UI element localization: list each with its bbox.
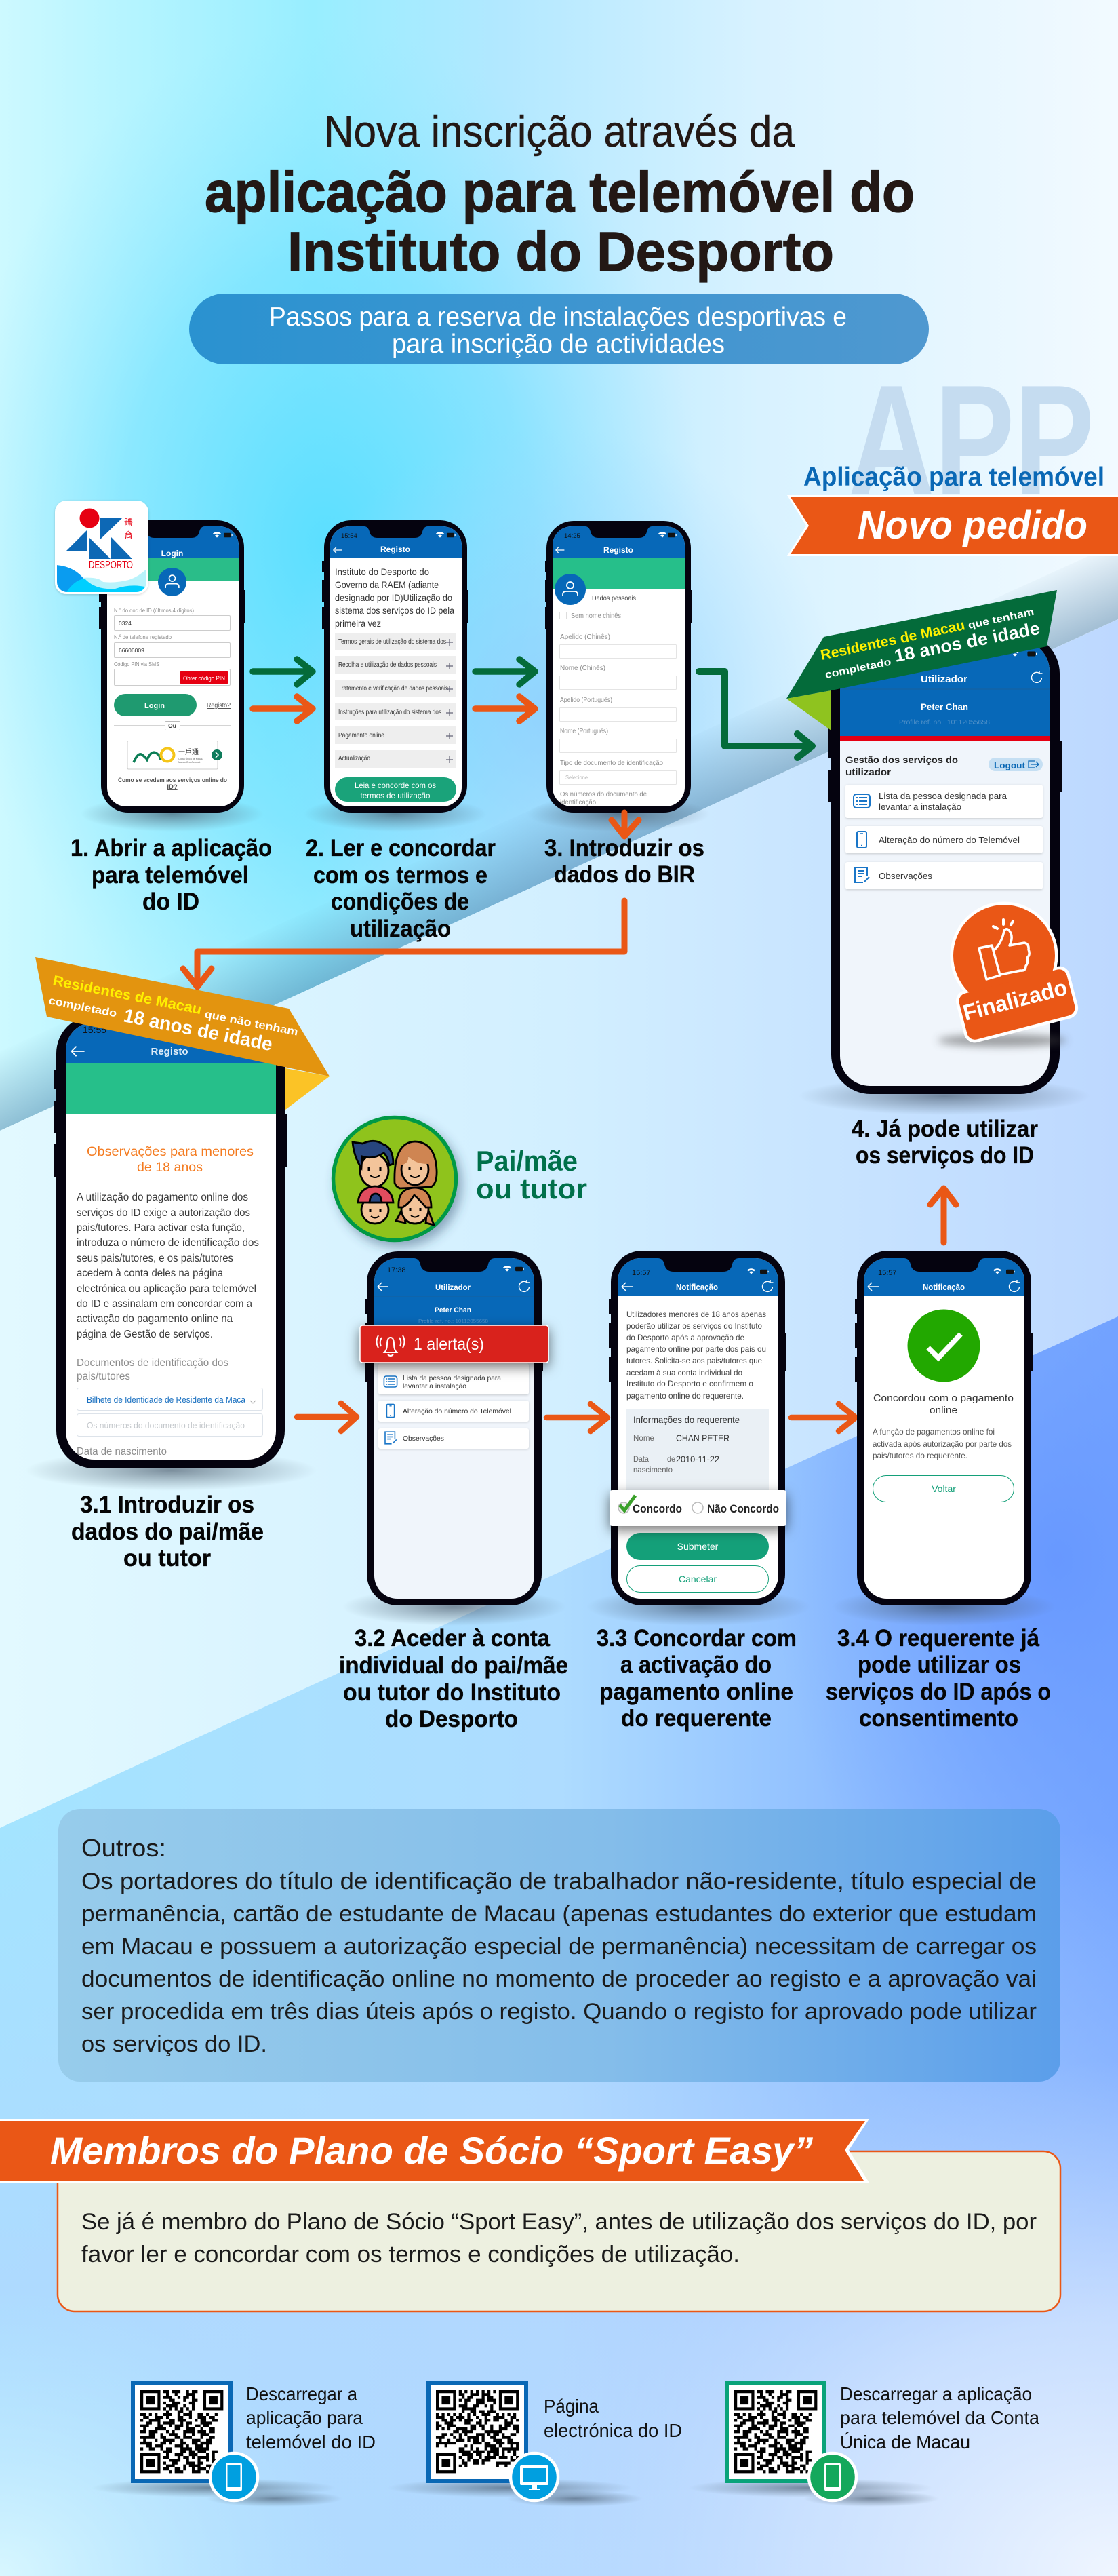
- QR block: app download: telemóvel do ID: [246, 2432, 376, 2453]
- caption: step 3.4: consentimento: [859, 1705, 1018, 1732]
- screen 3.1: electrónica ou aplicação para telemóvel: [77, 1283, 256, 1295]
- logo: Desporto app icon: 體: [124, 515, 133, 528]
- arrow: green connector to step 4: [699, 671, 812, 758]
- mom: [395, 1141, 437, 1188]
- screen 3.1: de 18 anos: [137, 1160, 203, 1175]
- title: Instituto do Desporto: [287, 221, 834, 283]
- phone 3.1: parents data: [37, 1022, 304, 1489]
- screen 3.1: Os números do documento de identificação: [87, 1420, 245, 1430]
- screen 3.2: levantar a instalação: [403, 1382, 466, 1390]
- screen 3.1: página de Gestão de serviços.: [77, 1329, 213, 1340]
- screen 3: Tipo de documento de identificação: [560, 760, 663, 767]
- screen 3.2: Utilizador: [435, 1283, 471, 1292]
- caption: step 3.1: 3.1 Introduzir os: [80, 1491, 254, 1518]
- screen 1: Como se acedem aos serviços online do: [118, 777, 227, 784]
- screen 2: 15:54: [341, 532, 357, 540]
- ribbon: over 18 (green): que tenham: [967, 606, 1035, 631]
- caption: step 2: com os termos e: [313, 862, 487, 889]
- screen 2: Recolha e utilização de dados pessoais: [338, 661, 437, 669]
- dad: [353, 1141, 393, 1187]
- QR block: Macao One Account: para telemóvel da Conta: [840, 2407, 1039, 2428]
- ribbon: under 18 (orange): completado: [47, 995, 118, 1019]
- screen 3.3: Informações do requerente: [633, 1414, 740, 1425]
- ribbon: Membros do Plano de Sócio: Membros do Plano de Sócio “Sport Easy”: [50, 2129, 813, 2172]
- phone 3: personal data form: [527, 521, 710, 832]
- alert bar: [360, 1325, 548, 1363]
- screen 3: Apelido (Português): [560, 697, 612, 704]
- screen 3.4: Concordou com o pagamento: [873, 1392, 1014, 1404]
- screen 3.2: Peter Chan: [435, 1306, 471, 1314]
- caption: step 2: 2. Ler e concordar: [306, 835, 496, 861]
- ribbon: Membros do Plano de Sócio: [0, 2119, 869, 2183]
- QR block: Macao One Account: [688, 2383, 1039, 2507]
- screen 3.3: acedam à sua conta individual do: [626, 1368, 742, 1378]
- screen 2: designado por ID)Utilização do: [335, 592, 452, 603]
- caption: step 3.2: individual do pai/mãe: [339, 1652, 568, 1679]
- subtitle pill: Passos para a reserva de instalações desportivas e: [269, 303, 847, 332]
- screen 2: Registo: [380, 545, 410, 554]
- screen 3: Selecione: [565, 775, 588, 781]
- QR block: website: electrónica do ID: [544, 2420, 682, 2441]
- ribbon: over 18 (green): 18 anos de idade: [892, 618, 1041, 666]
- caption: step 3.2: do Desporto: [385, 1706, 518, 1732]
- screen 3: Nome (Português): [560, 728, 608, 735]
- screen 3: identificação: [560, 799, 596, 806]
- logo: Desporto app icon: 育: [124, 528, 133, 541]
- screen 3.1: pais/tutores. Para activar esta função,: [77, 1222, 245, 1234]
- screen 4: Gestão dos serviços do: [845, 754, 958, 765]
- screen 3.1: activação do pagamento online na: [77, 1313, 233, 1325]
- screen 3: Nome (Chinês): [560, 665, 605, 672]
- screen 3.3: Instituto do Desporto e confirmem o: [626, 1379, 753, 1388]
- screen 3: 14:25: [564, 532, 580, 540]
- icon: bell: [377, 1335, 404, 1356]
- QR block: website: Página: [544, 2396, 599, 2417]
- screen 1: N.º do doc de ID (últimos 4 dígitos): [114, 607, 194, 614]
- icon: thumbs up: [979, 929, 1029, 979]
- screen 1: Login: [161, 549, 183, 558]
- arrow: up from step 3.4 to step 4: [930, 1188, 956, 1243]
- screen 4: Logout: [994, 760, 1026, 770]
- screen 3.3: do Desporto após a aprovação de: [626, 1333, 744, 1342]
- screen 3.2: 17:38: [387, 1266, 406, 1274]
- screen 2: Actualização: [338, 755, 370, 762]
- heading: Pai/mãe ou tutor: ou tutor: [476, 1173, 587, 1205]
- screen 3.2: [374, 1258, 534, 1599]
- girl: [396, 1188, 434, 1225]
- panel: Outros: Os portadores do título de identificação de trabalhador não-residente, título especial de: [81, 1869, 1037, 1894]
- screen 3.2: Observações: [403, 1435, 444, 1443]
- screen 3.1: Registo: [151, 1046, 188, 1057]
- caption: step 4: [852, 1116, 1038, 1169]
- QR block: app download: [92, 2383, 376, 2507]
- caption: step 1: [71, 835, 272, 915]
- screen 3: Dados pessoais: [592, 595, 636, 602]
- caption: step 4: os serviços do ID: [856, 1142, 1034, 1169]
- ribbon: under 18 (orange): que não tenham: [203, 1009, 299, 1038]
- icon: family circle: [334, 1118, 456, 1240]
- heading: Aplicação para telemóvel: Aplicação para telemóvel: [803, 463, 1104, 492]
- screen 3.3: [618, 1258, 778, 1599]
- caption: step 3.4: [826, 1625, 1051, 1732]
- boy: [358, 1186, 393, 1224]
- screen 3.3: pagamento online do requerente.: [626, 1391, 744, 1401]
- panel: Outros: ser procedida em três dias úteis após o registo. Quando o registo for aprovado pode utilizar: [81, 1999, 1037, 2025]
- icon: phone badge: [210, 2453, 258, 2501]
- caption: step 1: do ID: [142, 889, 199, 915]
- consent popup: Não Concordo: [707, 1502, 779, 1515]
- screen 3.4: A função de pagamentos online foi: [873, 1427, 995, 1437]
- screen 4: utilizador: [845, 766, 892, 777]
- caption: step 3: [544, 835, 704, 888]
- screen 3.3: Utilizadores menores de 18 anos apenas: [626, 1310, 766, 1319]
- one account logo: 一戶通: [178, 746, 199, 756]
- screen 3.1: 15:55: [83, 1024, 106, 1035]
- panel: Outros: os serviços do ID.: [81, 2031, 267, 2057]
- screen 2: [330, 526, 462, 806]
- caption: step 3.1: dados do pai/mãe: [71, 1519, 264, 1545]
- caption: step 3.2: [339, 1625, 568, 1732]
- caption: step 3.3: pagamento online: [599, 1679, 793, 1705]
- one account logo: Conta Única de Macau: [178, 757, 203, 760]
- panel: Sport Easy members: Se já é membro do Plano de Sócio “Sport Easy”, antes de utilização dos serviços do ID, por: [81, 2209, 1037, 2235]
- screen 3.1: introduza o número de identificação dos: [77, 1237, 259, 1249]
- phone 3.3: consent: [586, 1251, 810, 1626]
- screen 3.1: pais/tutores: [77, 1371, 130, 1382]
- screen 2: Governo da RAEM (adiante: [335, 579, 439, 590]
- phone 4: user services: [812, 644, 1077, 1114]
- screen 3: [553, 526, 685, 806]
- arrow: orange connector to step 3.1: [183, 901, 624, 987]
- arrow: step 3 down: [612, 813, 639, 836]
- screen 3.2: Lista da pessoa designada para: [403, 1374, 501, 1382]
- title: Nova inscrição através da: [324, 106, 795, 156]
- caption: step 3: dados do BIR: [554, 861, 695, 888]
- caption: step 1: para telemóvel: [92, 862, 249, 889]
- phone 3.4: success: [832, 1251, 1056, 1626]
- screen 3: Os números do documento de: [560, 791, 647, 798]
- screen 3.1: do ID e assinalam em concordar com a: [77, 1298, 252, 1310]
- caption: step 3.3: 3.3 Concordar com: [597, 1625, 797, 1652]
- caption: step 3.1: ou tutor: [123, 1545, 211, 1572]
- screen 4: Lista da pessoa designada para: [879, 791, 1007, 801]
- screen 3.3: 2010-11-22: [676, 1453, 719, 1464]
- ribbon: Novo pedido: [787, 495, 1118, 556]
- QR block: Macao One Account: Única de Macau: [840, 2432, 970, 2453]
- screen 3.1: acedem à conta deles na página: [77, 1268, 223, 1279]
- screen 3: Apelido (Chinês): [560, 633, 610, 641]
- icon: phone badge green: [809, 2453, 856, 2501]
- QR block: website: [388, 2383, 682, 2507]
- icon: monitor badge: [511, 2453, 558, 2501]
- panel: Outros: Outros:: [81, 1834, 166, 1862]
- consent popup: Concordo: [633, 1502, 682, 1515]
- ribbon: over 18 (green): [786, 590, 1057, 730]
- phone 2: terms: [304, 520, 487, 832]
- screen 3.2: Alteração do número do Telemóvel: [403, 1407, 511, 1416]
- title: [205, 106, 915, 283]
- screen 4: Profile ref. no.: 10112055658: [899, 719, 990, 726]
- phone 3.2: parent account: [342, 1251, 566, 1626]
- caption: step 3.4: 3.4 O requerente já: [837, 1625, 1040, 1652]
- caption: step 3.4: serviços do ID após o: [826, 1679, 1051, 1705]
- badge: Finalizado: [938, 902, 1081, 1047]
- screen 1: [107, 526, 239, 806]
- caption: step 3.3: a activação do: [620, 1652, 772, 1678]
- screen 2: sistema dos serviços do ID pela: [335, 605, 454, 616]
- screen 3.3: CHAN PETER: [676, 1432, 730, 1443]
- screen 3.1: Data de nascimento: [77, 1446, 167, 1458]
- panel: Outros: em Macau e possuem a autorização especial de permanência) necessitam de carregar os: [81, 1934, 1037, 1959]
- ribbon: under 18 (orange): 18 anos de idade: [122, 1004, 275, 1055]
- heading: Pai/mãe ou tutor: Pai/mãe: [476, 1145, 578, 1177]
- QR block: app download: Descarregar a: [246, 2383, 357, 2404]
- panel: Outros: permanência, cartão de estudante de Macau (apenas estudantes do exterior que estudam: [81, 1901, 1037, 1927]
- screen 4: Observações: [879, 871, 933, 881]
- one account logo: Macao One Account: [178, 761, 200, 764]
- QR block: app download: aplicação para: [246, 2407, 363, 2428]
- caption: step 3.2: 3.2 Aceder à conta: [355, 1625, 550, 1652]
- screen 3.3: Nome: [633, 1433, 654, 1443]
- consent popup: [610, 1490, 786, 1526]
- phone 1: login: [81, 520, 264, 832]
- screen 3.1: Observações para menores: [87, 1145, 254, 1159]
- screen 2: Termos gerais de utilização do sistema dos: [338, 638, 446, 646]
- faces: [369, 1167, 421, 1212]
- one account logo: [127, 741, 222, 769]
- screen 3.1: [66, 1022, 276, 1460]
- arrows: step 1 to 2: [253, 659, 313, 721]
- ribbon: under 18 (orange): Residentes de Macau: [52, 973, 203, 1017]
- screen 1: ID?: [167, 783, 178, 791]
- caption: step 3.2: ou tutor do Instituto: [343, 1679, 561, 1706]
- screen 3.1: seus pais/tutores, e os pais/tutores: [77, 1253, 233, 1264]
- screen 4: levantar a instalação: [879, 802, 961, 812]
- screen 4: [840, 641, 1050, 1086]
- screen 3.4: online: [930, 1405, 957, 1416]
- screen 3.3: 15:57: [632, 1269, 651, 1277]
- screen 3.4: Voltar: [932, 1483, 956, 1494]
- screen 3.1: A utilização do pagamento online dos: [77, 1192, 248, 1203]
- caption: step 1: 1. Abrir a aplicação: [71, 835, 272, 861]
- screen 1: Código PIN via SMS: [114, 661, 159, 667]
- screen 3.3: tutores. Solicita-se aos pais/tutores que: [626, 1356, 762, 1365]
- screen 1: Registo?: [207, 702, 231, 709]
- QR block: Macao One Account: Descarregar a aplicação: [840, 2383, 1032, 2404]
- screen 3.3: poderão utilizar os serviços do Instituto: [626, 1321, 762, 1331]
- screen 3.3: de: [667, 1454, 675, 1464]
- screen 3.3: Data: [633, 1454, 649, 1464]
- screen 3.3: pagamento online por parte dos pais ou: [626, 1344, 766, 1354]
- screen 3.3: nascimento: [633, 1465, 673, 1475]
- screen 3.3: Cancelar: [679, 1574, 717, 1584]
- screen 3.1: Documentos de identificação dos: [77, 1357, 228, 1369]
- caption: step 4: 4. Já pode utilizar: [852, 1116, 1038, 1142]
- screen 3.3: Notificação: [676, 1282, 718, 1292]
- panel: Sport Easy members: [58, 2151, 1060, 2311]
- panel: Outros: [58, 1809, 1060, 2082]
- screen 3.4: 15:57: [878, 1269, 897, 1277]
- screen 4: Utilizador: [921, 674, 967, 685]
- screen 3.4: activada após autorização por parte dos: [873, 1439, 1012, 1449]
- caption: step 2: utilização: [350, 916, 451, 942]
- screen 1: N.º de telefone registado: [114, 633, 172, 640]
- subtitle pill: para inscrição de actividades: [392, 330, 725, 359]
- screen 3: Registo: [603, 545, 633, 555]
- panel: Sport Easy members: favor ler e concordar com os termos e condições de utilização.: [81, 2242, 740, 2267]
- screen 3.1: serviços do ID exige a autorização dos: [77, 1207, 250, 1219]
- logo: Desporto app icon: [55, 501, 148, 594]
- caption: step 3.4: pode utilizar os: [858, 1652, 1021, 1678]
- screen 1: Ou: [168, 722, 176, 729]
- caption: step 3.3: [597, 1625, 797, 1732]
- caption: step 2: [306, 835, 496, 942]
- arrows: row 2: [297, 1403, 856, 1431]
- ribbon: Novo pedido: Novo pedido: [858, 503, 1087, 547]
- caption: step 3: 3. Introduzir os: [544, 835, 704, 861]
- caption: step 2: condições de: [331, 889, 469, 915]
- screen 1: Obter código PIN: [183, 675, 225, 682]
- screen 3.1: Bilhete de Identidade de Residente da Maca: [87, 1394, 246, 1405]
- screen 3: Sem nome chinês: [571, 612, 621, 620]
- icon: check circle: [907, 1309, 980, 1382]
- screen 2: termos de utilização: [361, 791, 431, 800]
- screen 2: primeira vez: [335, 618, 381, 629]
- caption: step 3.3: do requerente: [621, 1705, 772, 1732]
- screen 3.2: Profile ref. no.: 10112055658: [418, 1318, 488, 1324]
- screen 1: 66606009: [119, 647, 144, 654]
- subtitle pill: [189, 294, 929, 364]
- screen 4: Peter Chan: [921, 701, 968, 712]
- screen 3.3: Submeter: [677, 1541, 719, 1552]
- screen 1: 0324: [119, 620, 132, 627]
- screen 2: Instituto do Desporto do: [335, 566, 429, 577]
- ribbon: over 18 (green): completado: [824, 657, 892, 681]
- badge: Finalizado: Finalizado: [960, 975, 1070, 1026]
- ribbon: over 18 (green): Residentes de Macau: [819, 617, 966, 663]
- screen 2: Tratamento e verificação de dados pessoais: [338, 685, 448, 692]
- screen 2: Leia e concorde com os: [355, 781, 436, 790]
- title: aplicação para telemóvel do: [205, 160, 915, 224]
- screen 2: Instruções para utilização do sistema dos: [338, 709, 441, 716]
- heading: Pai/mãe ou tutor: [476, 1145, 587, 1205]
- screen 2: Pagamento online: [338, 732, 384, 739]
- logo: Desporto app icon: DESPORTO: [89, 560, 133, 571]
- alert bar: 1 alerta(s): [414, 1335, 484, 1354]
- arrows: step 2 to 3: [475, 659, 535, 721]
- screen 1: Login: [144, 702, 165, 710]
- screen 3.4: [864, 1258, 1024, 1599]
- panel: Outros: documentos de identificação online no momento de proceder ao registo e a aprovação vai: [81, 1966, 1037, 1992]
- ribbon: under 18 (orange): [35, 957, 330, 1110]
- caption: step 3.1: [71, 1491, 264, 1572]
- screen 4: Alteração do número do Telemóvel: [879, 835, 1020, 845]
- screen 3.4: pais/tutores do requerente.: [873, 1451, 967, 1460]
- screen 3.4: Notificação: [923, 1282, 965, 1292]
